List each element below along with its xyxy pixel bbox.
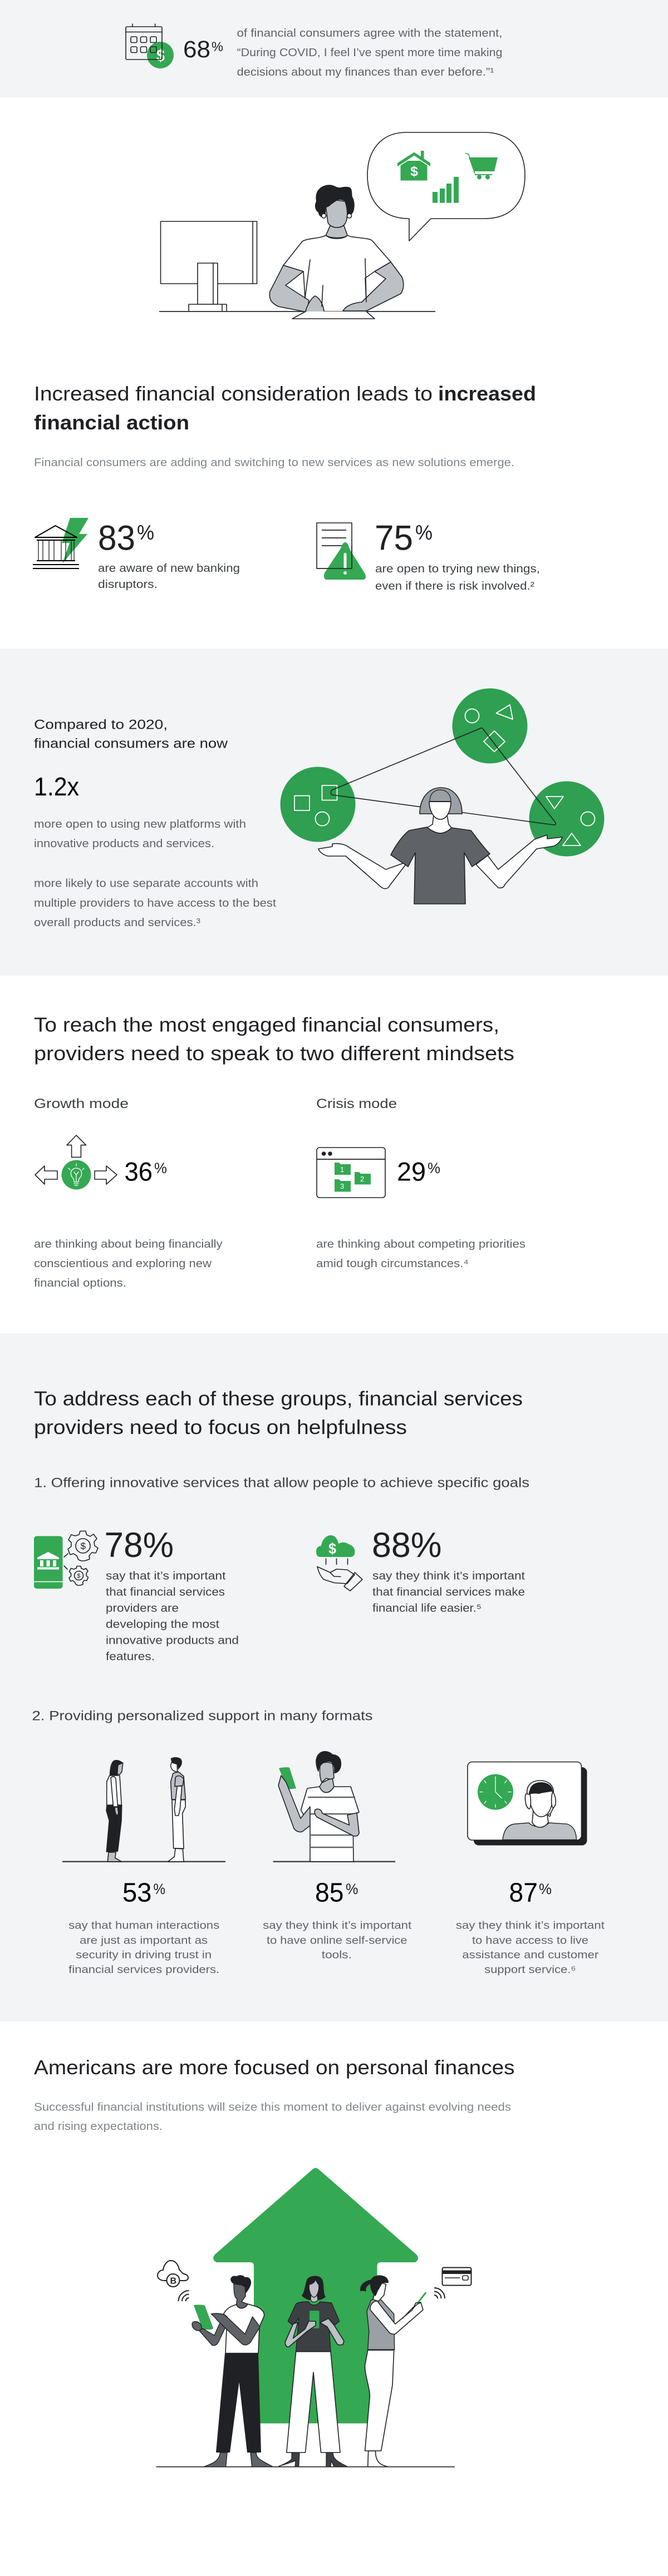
column: crisis mode: amid tough circumstances.⁴ — [316, 1258, 469, 1270]
stat: 53 percent: are just as important as — [80, 1935, 208, 1947]
woman figure — [269, 185, 404, 314]
column: crisis mode: are thinking about competing priorities — [316, 1238, 525, 1250]
panel: compared to 2020 — [0, 649, 668, 976]
heading: personal finances: Americans are more focused on personal finances — [34, 2056, 514, 2079]
subheading: Financial consumers are adding and switching to new services as new solutions emerge. — [34, 457, 514, 469]
stat: 87 percent: % — [539, 1881, 552, 1897]
icon: wifi left — [178, 2291, 189, 2301]
icon: phone bank with gears — [34, 1531, 98, 1589]
stat: 87 percent: assistance and customer — [462, 1949, 599, 1961]
icon: calendar with dollar coin — [126, 24, 174, 68]
column: growth mode: % — [154, 1160, 167, 1176]
column: crisis mode: Crisis mode — [316, 1096, 397, 1111]
heading: focus on helpfulness: providers need to focus on helpfulness — [34, 1416, 407, 1438]
column: growth mode: financial options. — [34, 1277, 126, 1289]
stat: 75 percent open to new things: even if there is risk involved.² — [375, 580, 534, 592]
circle: right provider — [529, 781, 605, 857]
heading: increased financial consideration: increased — [438, 382, 536, 405]
heading: increased financial consideration: financial action — [34, 411, 189, 434]
heading: focus on helpfulness: To address each of these groups, financial services — [34, 1387, 523, 1410]
text: survey statement: of financial consumers agree with the statement, — [237, 27, 502, 39]
illustration: video call support screen — [468, 1762, 587, 1846]
text: intro: financial consumers are now — [34, 736, 228, 751]
icon: bank with lightning — [33, 518, 89, 568]
stat: 78 percent: that financial services — [106, 1586, 225, 1599]
stat: 83 percent aware of disruptors — [33, 518, 240, 591]
stat: 87 percent: support service.⁶ — [484, 1964, 576, 1976]
panel: helpfulness — [0, 1333, 668, 2021]
stat: 88 percent: financial life easier.⁵ — [372, 1602, 482, 1614]
stat: 85 percent: say they think it’s important — [263, 1920, 412, 1932]
text: separate accounts: overall products and services.³ — [34, 917, 200, 929]
stat: 85 percent: to have online self-service — [267, 1935, 407, 1947]
stat: 83 percent aware of disruptors: disruptors. — [98, 579, 158, 591]
column: growth mode: are thinking about being financially — [34, 1238, 223, 1250]
stat: 53 percent — [68, 1878, 219, 1976]
illustration: woman at desk thinking about finances — [159, 132, 525, 319]
illustration: two people talking — [62, 1757, 225, 1862]
icon: bitcoin cloud: B — [170, 2276, 176, 2286]
column: crisis mode — [316, 1096, 525, 1270]
icon: phone bank with gears: $ — [80, 1541, 86, 1551]
stat: 68 percent — [183, 36, 223, 63]
icon: lightbulb with arrows — [35, 1135, 117, 1189]
column: growth mode: Growth mode — [34, 1096, 129, 1111]
text: survey statement: “During COVID, I feel I’ve spent more time making — [237, 47, 502, 59]
support agent with headset — [503, 1781, 577, 1840]
stat: 53 percent: 53 — [122, 1878, 151, 1908]
illustration: person with phone — [273, 1751, 395, 1862]
stat: 78 percent: say that it’s important — [106, 1570, 226, 1582]
icon: browser window with folders: 1 — [340, 1165, 344, 1174]
woman in profile with phone — [360, 2275, 426, 2467]
stat: 78 percent — [34, 1526, 239, 1663]
column: growth mode: 36 — [125, 1157, 153, 1186]
icon: house with dollar: $ — [410, 164, 419, 179]
striped shirt — [301, 1787, 359, 1862]
woman in profile — [106, 1760, 123, 1862]
heading: two mindsets — [34, 1013, 514, 1065]
panel: 68 percent intro band — [0, 0, 668, 97]
stat: 87 percent — [456, 1878, 605, 1976]
stat: 83 percent aware of disruptors: are aware of new banking — [98, 562, 240, 575]
text: separate accounts: multiple providers to have access to the best — [34, 897, 276, 909]
heading: increased financial consideration — [34, 382, 536, 434]
stat: 78 percent: 78% — [105, 1526, 174, 1565]
column: crisis mode: % — [428, 1160, 440, 1176]
clock — [478, 1774, 513, 1810]
stat: 87 percent: 87 — [509, 1878, 538, 1908]
speech bubble with finance icons — [367, 132, 525, 241]
stat: 68 percent: 68 — [183, 36, 210, 63]
green up arrow — [213, 2168, 418, 2424]
woman with phone — [277, 2276, 348, 2467]
subheading: seize this moment: Successful financial institutions will seize this moment to deliver against evolving needs — [34, 2102, 511, 2114]
connection lines — [331, 728, 556, 825]
icon: cloud dollar over hand — [316, 1535, 362, 1591]
stat: 53 percent: security in driving trust in — [76, 1949, 212, 1961]
stat: 53 percent: financial services providers. — [68, 1964, 219, 1976]
desk line — [159, 311, 435, 312]
stat: 78 percent: innovative products and — [106, 1634, 239, 1647]
stat: 88 percent: that financial services make — [372, 1586, 525, 1599]
column: growth mode — [34, 1096, 223, 1289]
stat: 85 percent — [263, 1878, 412, 1961]
icon: bitcoin cloud — [158, 2261, 188, 2287]
stat: 87 percent: to have access to live — [472, 1935, 588, 1947]
stat: 85 percent: tools. — [322, 1949, 352, 1961]
subheading: offering innovative services: 1. Offering innovative services that allow people to achieve specific goals — [34, 1475, 529, 1491]
stat: 83 percent aware of disruptors: 83 — [98, 518, 135, 557]
column: growth mode: conscientious and exploring new — [34, 1258, 212, 1270]
ground line — [156, 2466, 455, 2468]
icon: document with warning — [317, 523, 366, 580]
stat: 88 percent: 88% — [372, 1526, 442, 1565]
stat: 83 percent aware of disruptors: % — [137, 521, 154, 544]
stat: 85 percent: % — [346, 1881, 358, 1897]
phone — [279, 1767, 296, 1789]
heading: two mindsets: providers need to speak to two different mindsets — [34, 1042, 514, 1065]
man in profile — [168, 1757, 185, 1862]
icon: shopping cart — [465, 154, 498, 179]
icon: calendar with dollar coin: $ — [156, 47, 165, 65]
column: crisis mode: 29 — [397, 1157, 426, 1186]
icon: browser window with folders: 3 — [340, 1182, 344, 1190]
paper on desk — [292, 312, 375, 319]
circle: top provider — [452, 689, 528, 763]
stat: 75 percent open to new things: are open to trying new things, — [375, 563, 540, 575]
stat: 75 percent open to new things — [317, 518, 540, 592]
subheading: seize this moment: and rising expectations. — [34, 2120, 163, 2133]
icon: bar chart — [433, 177, 459, 203]
heading: increased financial consideration: Increased financial consideration leads to — [34, 382, 433, 405]
illustration: person with provider circles — [281, 689, 605, 904]
stat: 87 percent: say they think it’s important — [456, 1920, 605, 1932]
stat: 75 percent open to new things: % — [415, 521, 433, 544]
heading: two mindsets: To reach the most engaged financial consumers, — [34, 1013, 499, 1036]
icon: house with dollar — [397, 151, 430, 180]
text: separate accounts — [34, 878, 276, 929]
neck and face — [316, 1751, 341, 1792]
icon: cloud dollar over hand: $ — [328, 1540, 336, 1557]
stat: 88 percent: say they think it’s important — [372, 1570, 525, 1582]
text: platforms — [34, 818, 246, 850]
circle: left provider — [281, 767, 355, 842]
icon: credit card — [442, 2267, 471, 2285]
text: separate accounts: more likely to use separate accounts with — [34, 878, 258, 890]
illustration: three people before growth arrow — [156, 2168, 471, 2467]
heading: focus on helpfulness — [34, 1387, 523, 1438]
text: platforms: innovative products and services. — [34, 838, 214, 850]
icon: browser window with folders: 2 — [360, 1175, 364, 1183]
icon: wifi right — [434, 2288, 445, 2298]
stat: 53 percent: say that human interactions — [68, 1920, 219, 1932]
monitor — [160, 221, 257, 312]
icon: phone bank with gears: $ — [77, 1573, 81, 1580]
man with tablet — [192, 2275, 273, 2467]
stat: 85 percent: 85 — [315, 1878, 344, 1908]
stat: 88 percent — [316, 1526, 525, 1614]
text: intro: Compared to 2020, — [34, 718, 168, 732]
stat: 1.2x: 1.2x — [34, 772, 79, 801]
stat: 75 percent open to new things: 75 — [375, 518, 413, 557]
subheading: seize this moment — [34, 2102, 511, 2133]
text: survey statement — [237, 27, 502, 78]
stat: 53 percent: % — [154, 1881, 165, 1897]
text: platforms: more open to using new platforms with — [34, 818, 246, 830]
woman figure — [318, 788, 562, 904]
subheading: personalized support: 2. Providing personalized support in many formats — [32, 1709, 373, 1723]
text: survey statement: decisions about my finances than ever before.”¹ — [237, 66, 494, 78]
stat: 78 percent: features. — [106, 1651, 155, 1663]
stat: 68 percent: % — [212, 39, 223, 55]
icon: browser window with folders — [317, 1148, 385, 1198]
stat: 78 percent: developing the most — [106, 1619, 219, 1631]
text: intro — [34, 718, 228, 751]
arms — [278, 1776, 359, 1836]
stat: 78 percent: providers are — [106, 1602, 179, 1614]
